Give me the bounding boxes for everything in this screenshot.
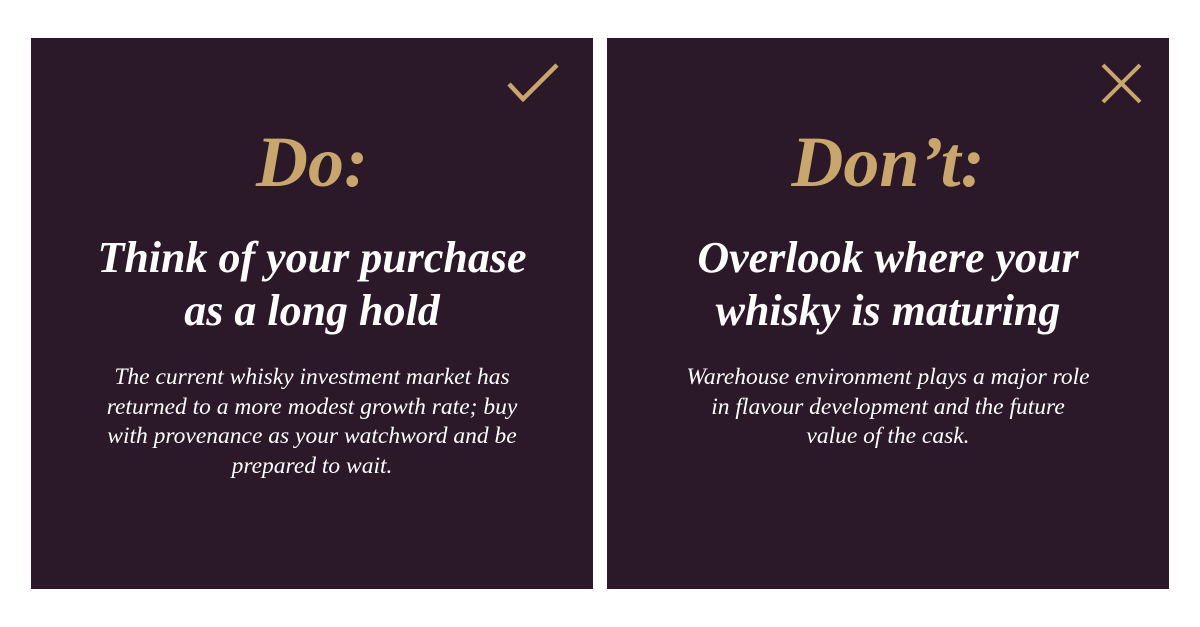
text block: dont — [686, 364, 1090, 449]
text block: do: The current whisky investment market has — [114, 364, 510, 390]
text block: dont: Warehouse environment plays a major role — [686, 364, 1090, 390]
icon: cross — [1102, 64, 1142, 104]
text block: do: with provenance as your watchword and be — [107, 423, 517, 449]
subheading: dont: whisky is maturing — [716, 286, 1060, 335]
text block: dont: in flavour development and the future — [711, 394, 1065, 420]
subheading: do — [97, 233, 527, 335]
text block: do — [107, 364, 518, 478]
subheading: do: as a long hold — [184, 286, 440, 335]
subheading: do: Think of your purchase — [97, 233, 527, 282]
heading: Don't: Don’t: — [791, 122, 985, 202]
heading: Do: Do: — [256, 122, 368, 202]
subheading: dont — [697, 233, 1079, 335]
subheading: dont: Overlook where your — [697, 233, 1079, 282]
panel: do — [31, 38, 593, 589]
text block: do: returned to a more modest growth rate; buy — [107, 394, 517, 420]
text block: do: prepared to wait. — [232, 452, 392, 478]
panel: dont — [607, 38, 1169, 589]
icon: check mark — [508, 63, 558, 102]
text block: dont: value of the cask. — [806, 423, 970, 449]
